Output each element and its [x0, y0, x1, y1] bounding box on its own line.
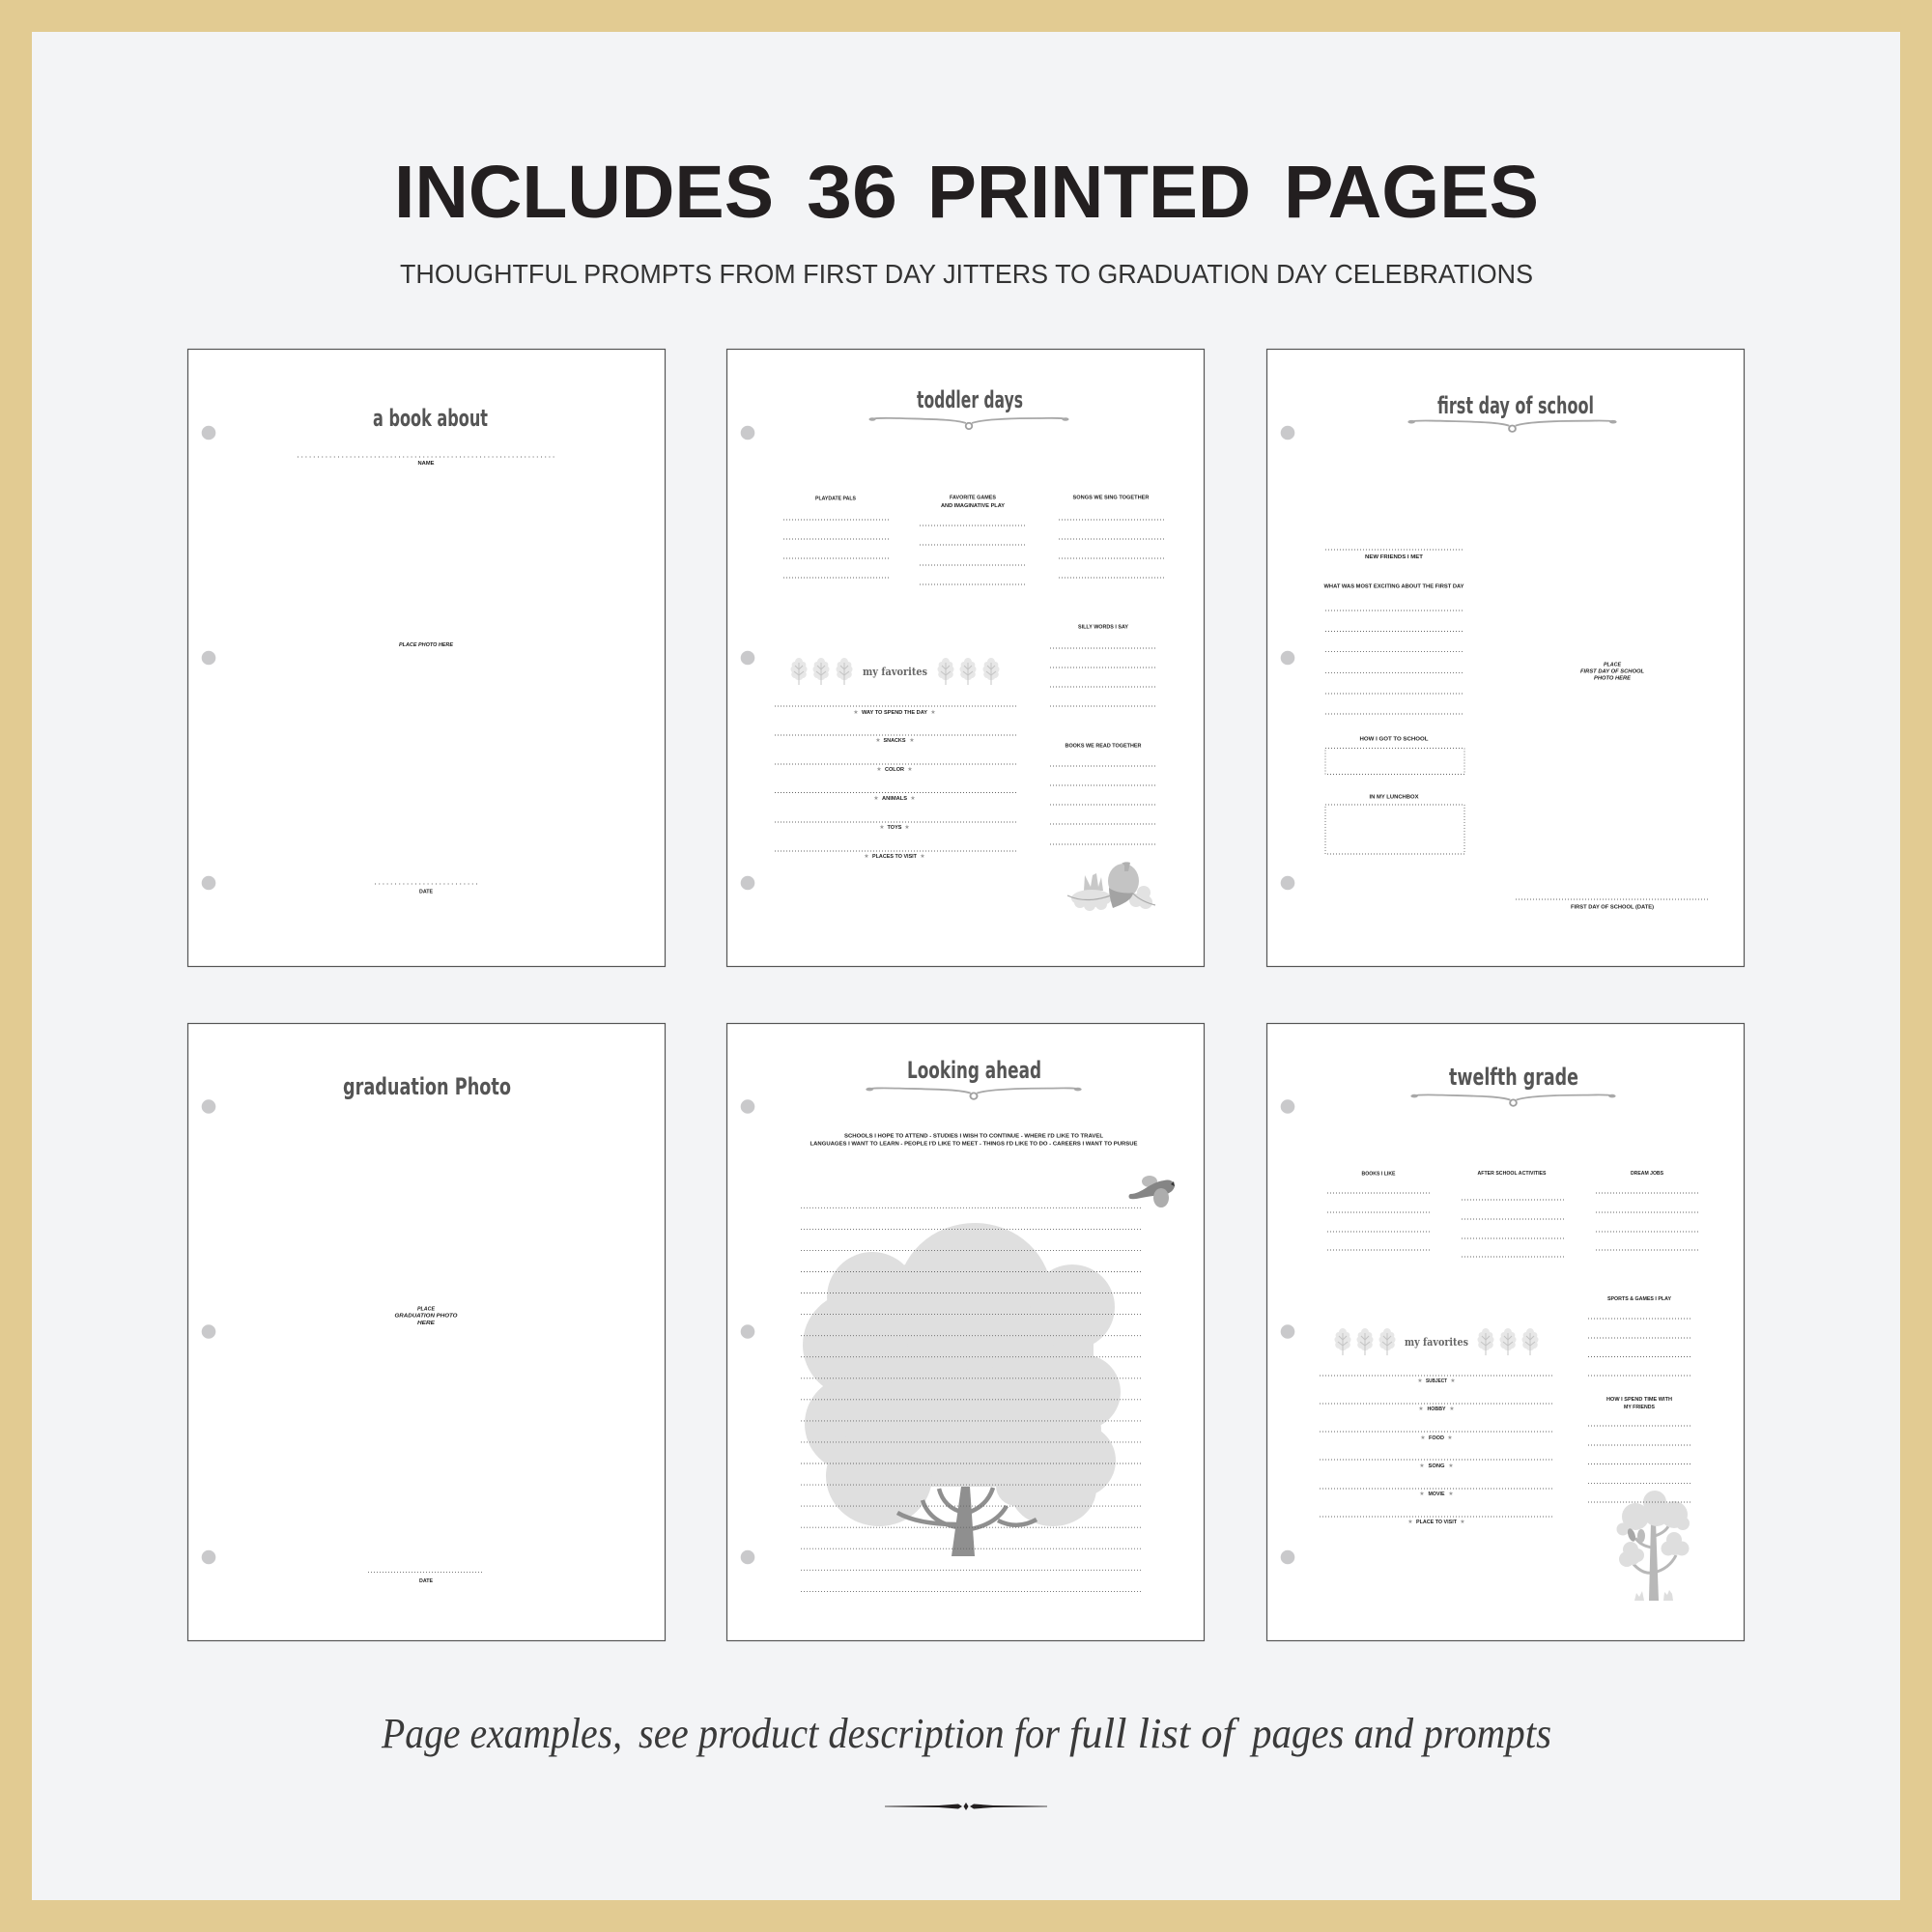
name label: NAME	[417, 461, 435, 467]
column: playdate pals	[783, 497, 891, 578]
most exciting	[1323, 584, 1464, 714]
photo placeholder: GRADUATION PHOTO	[394, 1314, 458, 1320]
favorites labels: ★	[879, 824, 885, 831]
favorites labels: ANIMALS	[882, 796, 907, 802]
favorites labels: ★	[1419, 1463, 1425, 1469]
column: books	[1050, 744, 1156, 844]
favorites labels: ★	[1419, 1491, 1425, 1497]
column: books: BOOKS WE READ TOGETHER	[1065, 744, 1142, 750]
column: friends	[1588, 1397, 1691, 1502]
caption: full list of	[1069, 1710, 1240, 1757]
column: books	[1327, 1172, 1432, 1250]
photo placeholder: HERE	[417, 1321, 435, 1326]
favorites lines	[775, 706, 1016, 851]
date label: DATE	[419, 889, 433, 895]
photo placeholder: PHOTO HERE	[1594, 676, 1631, 682]
favorites labels	[1407, 1378, 1465, 1525]
lunchbox: IN MY LUNCHBOX	[1370, 795, 1419, 801]
favorites labels: HOBBY	[1428, 1406, 1446, 1412]
favorites labels: PLACE TO VISIT	[1416, 1520, 1458, 1525]
title: INCLUDES	[394, 151, 774, 234]
column: silly words: SILLY WORDS I SAY	[1078, 624, 1128, 630]
favorites labels: SUBJECT	[1426, 1378, 1447, 1384]
page heading: graduation Photo	[343, 1073, 511, 1100]
favorites labels: FOOD	[1429, 1435, 1444, 1441]
page heading: twelfth grade	[1449, 1064, 1578, 1091]
favorites labels: ★	[910, 795, 916, 802]
flourish	[866, 1088, 1082, 1099]
page heading: Looking ahead	[907, 1057, 1041, 1084]
column: sports	[1588, 1296, 1691, 1376]
new friends: NEW FRIENDS I MET	[1365, 554, 1424, 560]
favorites labels: SONG	[1428, 1463, 1445, 1469]
favorites labels: ★	[1407, 1519, 1413, 1525]
column: songs	[1059, 496, 1165, 578]
favorites labels: PLACES TO VISIT	[872, 854, 918, 860]
favorites labels: ★	[1417, 1378, 1423, 1384]
title	[394, 151, 1539, 234]
column: favorite games: AND IMAGINATIVE PLAY	[941, 503, 1005, 509]
favorites labels: ★	[853, 709, 859, 716]
column: friends: MY FRIENDS	[1624, 1405, 1655, 1410]
prompt text	[810, 1134, 1138, 1148]
photo placeholder	[1580, 663, 1645, 682]
panel: graduation photo	[187, 1024, 665, 1640]
column: activities	[1462, 1171, 1565, 1257]
column: dream jobs: DREAM JOBS	[1631, 1171, 1663, 1177]
column: dream jobs	[1596, 1171, 1699, 1250]
column: activities: AFTER SCHOOL ACTIVITIES	[1478, 1171, 1547, 1177]
caption: pages and prompts	[1249, 1710, 1551, 1757]
illustration: big tree	[803, 1223, 1121, 1556]
panel: twelfth grade	[1267, 1024, 1745, 1640]
column: books: BOOKS I LIKE	[1362, 1172, 1396, 1178]
how i got to school	[1325, 736, 1464, 775]
photo placeholder: PLACE	[417, 1307, 435, 1313]
page heading: first day of school	[1437, 392, 1594, 419]
favorites labels: ★	[907, 766, 913, 773]
icon: acorn and leaves	[1067, 862, 1155, 911]
column: playdate pals: PLAYDATE PALS	[815, 497, 856, 502]
title: 36	[807, 151, 897, 234]
favorites labels: ★	[864, 853, 869, 860]
photo placeholder: PLACE	[1604, 663, 1621, 668]
column: favorite games: FAVORITE GAMES	[950, 496, 996, 501]
favorites labels: ★	[1420, 1435, 1426, 1441]
flourish	[1410, 1094, 1616, 1106]
favorites labels: TOYS	[887, 825, 902, 831]
prompt text: LANGUAGES I WANT TO LEARN - PEOPLE I'D LIKE TO MEET - THINGS I'D LIKE TO DO - CAREERS I WANT TO PURSUE	[810, 1142, 1138, 1148]
how i got to school: HOW I GOT TO SCHOOL	[1360, 736, 1429, 742]
flourish	[1407, 420, 1617, 432]
favorites labels: ★	[904, 824, 910, 831]
column: favorite games	[920, 496, 1026, 584]
favorites labels: ★	[875, 737, 881, 744]
favorites labels: ★	[920, 853, 925, 860]
favorites labels: ★	[1448, 1463, 1454, 1469]
favorites labels: ★	[1449, 1406, 1455, 1412]
lunchbox	[1325, 795, 1464, 854]
favorites labels: MOVIE	[1428, 1492, 1445, 1497]
favorites labels: ★	[873, 795, 879, 802]
favorites labels: ★	[1418, 1406, 1424, 1412]
date line	[375, 883, 478, 885]
panel: first day of school	[1267, 350, 1745, 966]
title: PAGES	[1284, 151, 1539, 234]
photo placeholder: PLACE PHOTO HERE	[399, 642, 453, 648]
favorites labels: ★	[1460, 1519, 1465, 1525]
my favorites heading with leaves: my favorites	[1405, 1336, 1468, 1349]
column: sports: SPORTS & GAMES I PLAY	[1607, 1296, 1671, 1302]
illustration: small tree with squirrel	[1588, 1491, 1691, 1601]
date	[368, 1573, 483, 1584]
my favorites heading with leaves	[790, 658, 999, 685]
icon: bird	[1128, 1176, 1175, 1208]
favorites labels: ★	[1447, 1435, 1453, 1441]
most exciting: WHAT WAS MOST EXCITING ABOUT THE FIRST DAY	[1323, 584, 1464, 590]
caption: see product description for	[639, 1710, 1061, 1757]
prompt text: SCHOOLS I HOPE TO ATTEND - STUDIES I WISH TO CONTINUE - WHERE I'D LIKE TO TRAVEL	[844, 1134, 1104, 1140]
flourish	[868, 417, 1069, 429]
subtitle: THOUGHTFUL PROMPTS FROM FIRST DAY JITTERS TO GRADUATION DAY CELEBRATIONS	[400, 259, 1533, 289]
page heading: toddler days	[917, 386, 1023, 413]
favorites labels: ★	[876, 766, 882, 773]
favorites labels: COLOR	[885, 767, 904, 773]
ornament divider	[885, 1803, 1047, 1810]
favorites labels: ★	[909, 737, 915, 744]
favorites labels: ★	[1448, 1491, 1454, 1497]
my favorites heading with leaves	[1335, 1328, 1538, 1355]
favorites labels: SNACKS	[883, 738, 906, 744]
date: FIRST DAY OF SCHOOL (DATE)	[1571, 905, 1654, 911]
favorites labels: ★	[930, 709, 936, 716]
favorites labels	[853, 709, 936, 860]
photo placeholder: FIRST DAY OF SCHOOL	[1580, 668, 1645, 674]
panel: toddler days	[726, 350, 1204, 966]
photo placeholder	[394, 1307, 458, 1326]
favorites labels: ★	[1450, 1378, 1456, 1384]
panel: a book about	[187, 350, 665, 966]
caption: Page examples,	[381, 1710, 622, 1757]
caption	[381, 1710, 1551, 1757]
name line	[298, 456, 555, 458]
column: friends: HOW I SPEND TIME WITH	[1606, 1397, 1672, 1403]
favorites labels: WAY TO SPEND THE DAY	[862, 710, 927, 716]
column: silly words	[1050, 624, 1156, 706]
column: songs: SONGS WE SING TOGETHER	[1072, 496, 1150, 501]
title: PRINTED	[927, 151, 1251, 234]
page heading: a book about	[373, 405, 488, 432]
my favorites heading with leaves: my favorites	[863, 666, 927, 678]
writing lines	[801, 1208, 1143, 1591]
favorites lines	[1320, 1376, 1553, 1517]
date: DATE	[419, 1578, 433, 1584]
panel: looking ahead	[726, 1024, 1204, 1640]
